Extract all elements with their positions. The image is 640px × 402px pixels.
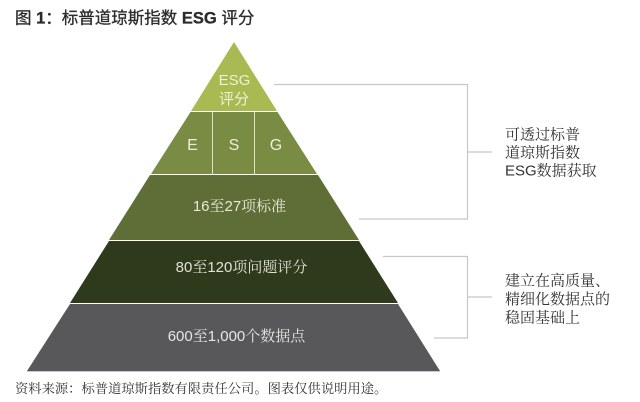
text block: data access: 道琼斯指数 xyxy=(505,144,580,162)
tier: 16 to 27 criteria: 16至27项标准 xyxy=(193,198,286,215)
text block: data access: 可透过标普 xyxy=(505,126,580,144)
bracket: lower tiers xyxy=(383,256,492,338)
source note: 资料来源：标普道琼斯指数有限责任公司。图表仅供说明用途。 xyxy=(15,380,387,396)
text block: data access: ESG数据获取 xyxy=(505,162,597,180)
tier: 80 to 120 question scores: 80至120项问题评分 xyxy=(176,259,307,276)
tier: 80 to 120 question scores xyxy=(70,241,398,303)
bracket: upper tiers xyxy=(274,84,492,219)
tier: E S G pillars: G xyxy=(270,137,282,154)
text block: data foundation: 精细化数据点的 xyxy=(505,290,610,308)
text block: data foundation xyxy=(505,272,610,326)
pyramid xyxy=(27,42,440,372)
tier: E S G pillars xyxy=(151,112,317,174)
title: 图 1：标普道琼斯指数 ESG 评分 xyxy=(15,8,254,28)
text block: data access xyxy=(505,126,597,180)
tier: ESG score xyxy=(191,42,277,111)
tier: ESG score: ESG xyxy=(219,72,250,89)
tier: ESG score: 评分 xyxy=(219,91,249,108)
tier: E S G pillars: E xyxy=(187,137,198,154)
tier: 16 to 27 criteria xyxy=(109,175,359,240)
text block: data foundation: 稳固基础上 xyxy=(505,308,580,326)
tier: 600 to 1000 data points xyxy=(27,304,440,371)
text block: data foundation: 建立在高质量、 xyxy=(505,272,610,290)
tier: 600 to 1000 data points: 600至1,000个数据点 xyxy=(168,327,306,345)
tier: E S G pillars: S xyxy=(229,137,239,154)
